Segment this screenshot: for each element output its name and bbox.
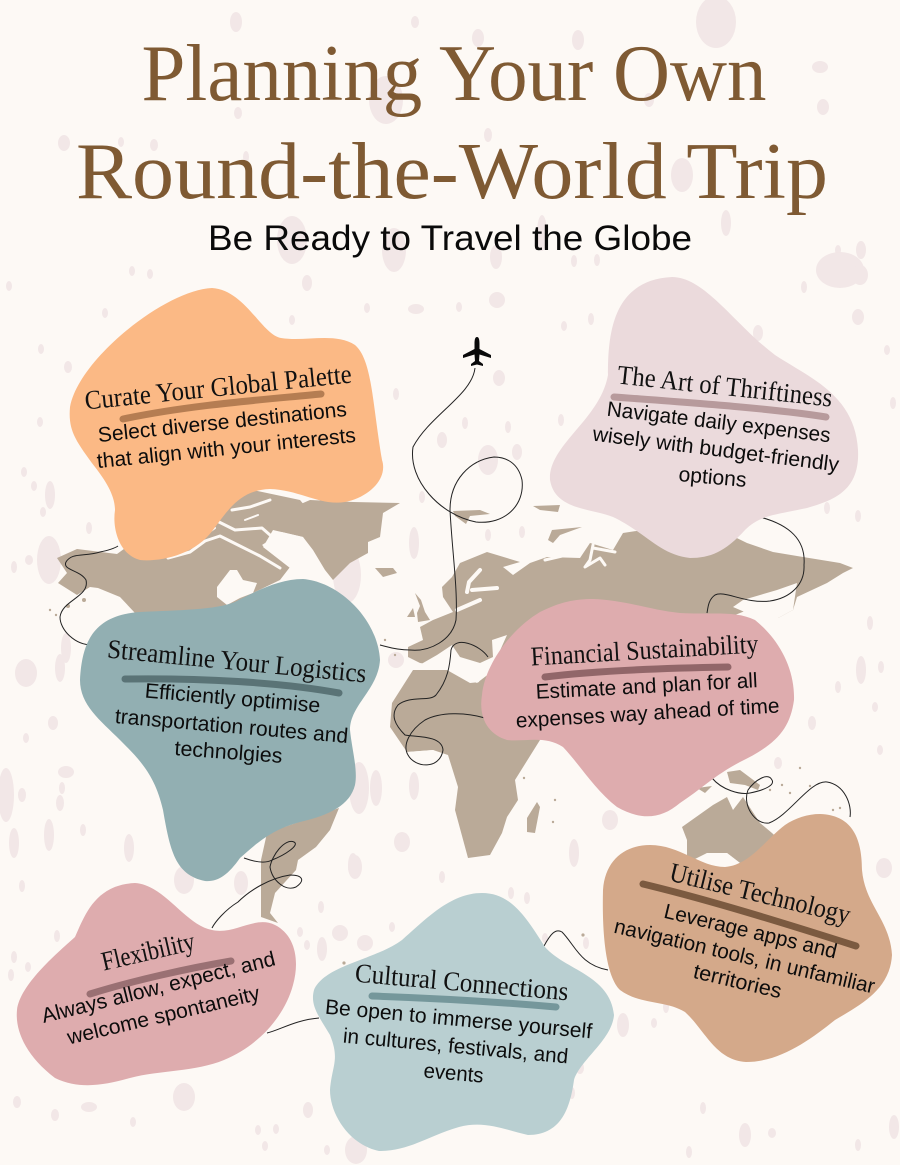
body text	[590, 398, 841, 492]
Svalbard	[453, 510, 490, 524]
heading: Curate Your Global Palette	[83, 359, 353, 416]
South America	[261, 808, 339, 923]
panel: streamline your logistics	[80, 579, 380, 881]
body text	[96, 398, 357, 473]
route from plane around the map	[380, 368, 522, 650]
sea channels	[168, 500, 797, 880]
body text: Estimate and plan for all	[535, 669, 758, 704]
panel: financial sustainability	[481, 599, 794, 816]
title	[76, 30, 828, 216]
Greenland	[273, 500, 400, 580]
body text: navigation tools, in unfamiliar	[612, 915, 877, 998]
title: Planning Your Own	[142, 30, 766, 118]
heading: Financial Sustainability	[530, 628, 760, 672]
heading: Flexibility	[98, 926, 198, 977]
Franz Josef Land	[533, 505, 560, 512]
Ireland	[407, 608, 415, 617]
world map	[49, 490, 853, 965]
body text	[515, 669, 780, 733]
body text: in cultures, festivals, and	[342, 1025, 569, 1068]
body text: transportation routes and	[114, 705, 349, 748]
panel: cultural connections	[313, 893, 614, 1151]
Madagascar	[527, 802, 540, 833]
body text: events	[423, 1059, 484, 1088]
panel: utilise technology	[603, 814, 892, 1062]
icon: airplane	[463, 337, 491, 366]
North America and Arctic islands	[57, 490, 310, 640]
Iceland	[375, 568, 397, 577]
panel: the art of thriftiness	[550, 277, 858, 558]
body text: that align with your interests	[96, 424, 357, 473]
body text: expenses way ahead of time	[515, 694, 780, 733]
body text: territories	[691, 960, 784, 1003]
body text: Select diverse destinations	[97, 398, 348, 447]
subtitle: Be Ready to Travel the Globe	[208, 219, 692, 258]
body text: Leverage apps and	[662, 900, 839, 963]
title: Round-the-World Trip	[76, 128, 828, 216]
body text: technolgies	[174, 737, 283, 768]
United Kingdom	[415, 593, 430, 622]
heading: Streamline Your Logistics	[106, 634, 368, 688]
body text: welcome spontaneity	[64, 982, 263, 1050]
body text: Navigate daily expenses	[606, 398, 832, 447]
body text: Be open to immerse yourself	[324, 996, 593, 1043]
body text: wisely with budget-friendly	[590, 422, 841, 477]
body text: Always allow, expect, and	[39, 948, 278, 1028]
New Guinea and islands	[727, 770, 760, 790]
heading: Cultural Connections	[354, 958, 570, 1006]
panel: curate your global palette	[70, 288, 383, 560]
body text	[114, 680, 349, 768]
heading: Utilise Technology	[667, 857, 854, 930]
heading: The Art of Thriftiness	[616, 359, 834, 413]
brown island dots	[49, 598, 841, 965]
body text	[324, 996, 593, 1088]
body text: options	[678, 463, 747, 492]
body text: Efficiently optimise	[144, 680, 321, 717]
Africa	[390, 670, 540, 858]
Eurasia	[408, 520, 853, 700]
panel: flexibility	[17, 883, 296, 1085]
Novaya Zemlya	[548, 527, 582, 543]
Australia	[682, 797, 790, 880]
route lines	[60, 368, 850, 1033]
